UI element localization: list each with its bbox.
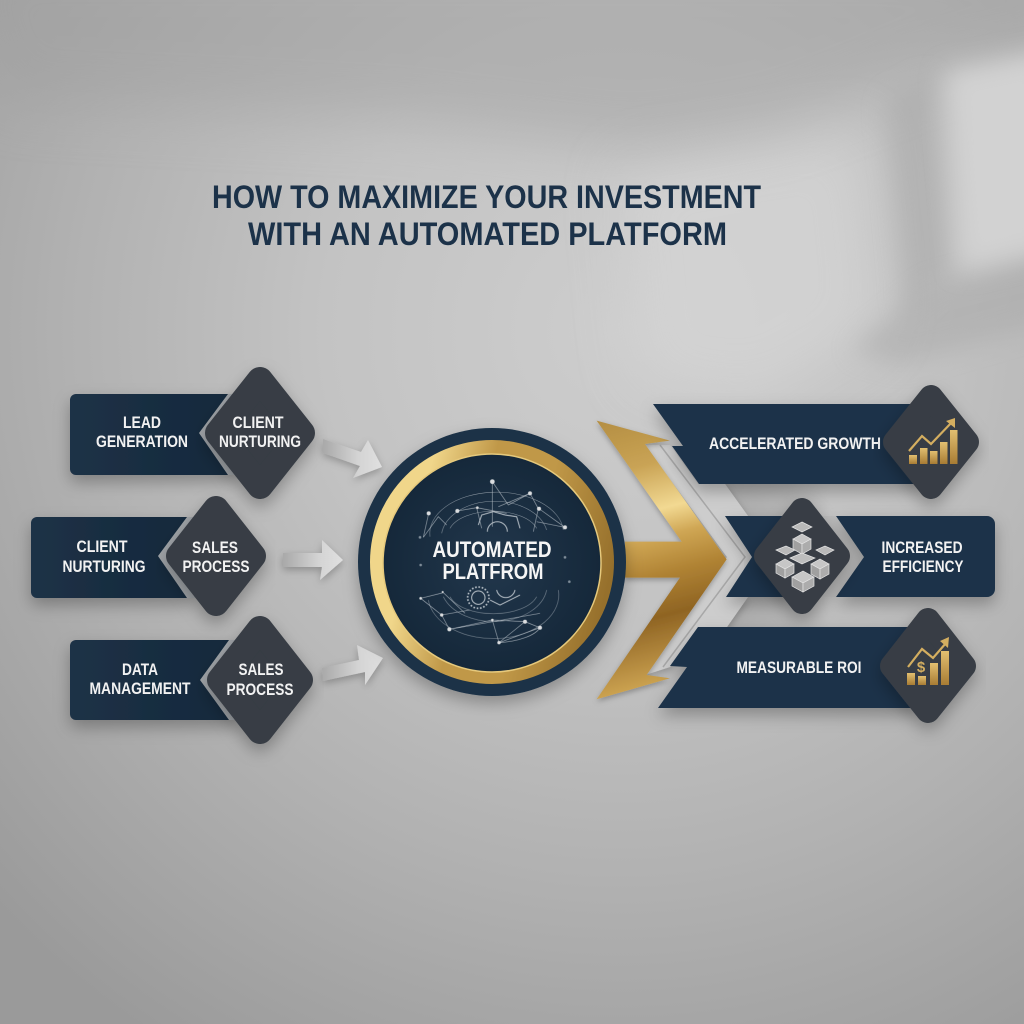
outcome 1: accelerated growth bbox=[653, 397, 967, 487]
label box: client nurturing: CLIENT bbox=[76, 537, 128, 556]
network and gear graphic bbox=[419, 479, 571, 644]
label box: client nurturing bbox=[31, 517, 198, 598]
label box: data management: MANAGEMENT bbox=[90, 679, 191, 698]
banner: INCREASED bbox=[882, 538, 962, 557]
panel: outcomes bbox=[653, 397, 995, 711]
outcome 2: increased efficiency bbox=[725, 510, 995, 602]
icon: dollar growth chart bbox=[892, 620, 964, 711]
central circle: automated platform bbox=[358, 428, 626, 696]
banner bbox=[725, 516, 995, 597]
banner bbox=[658, 627, 915, 708]
diamond: sales process: PROCESS bbox=[182, 557, 250, 576]
icon: growth chart bbox=[895, 397, 967, 487]
platform label: PLATFROM bbox=[442, 559, 544, 584]
diamond: sales process bbox=[179, 509, 253, 603]
outcome 3: measurable roi bbox=[658, 620, 964, 711]
title bbox=[212, 179, 761, 252]
label box: data management bbox=[70, 640, 240, 720]
label box: client nurturing: NURTURING bbox=[62, 557, 146, 576]
icon: dollar growth chart: $ bbox=[917, 659, 926, 676]
diamond: sales process: SALES bbox=[192, 538, 238, 557]
arrow: input 2 to platform bbox=[283, 540, 343, 580]
label box: lead generation: GENERATION bbox=[96, 432, 188, 451]
input row 3 bbox=[70, 629, 300, 731]
title: HOW TO MAXIMIZE YOUR INVESTMENT bbox=[212, 179, 761, 215]
input row 2 bbox=[31, 509, 253, 603]
diamond: client nurturing: NURTURING bbox=[219, 432, 301, 451]
arrow: input 3 to platform bbox=[322, 645, 383, 685]
label box: data management: DATA bbox=[122, 660, 158, 679]
title: WITH AN AUTOMATED PLATFORM bbox=[248, 216, 727, 252]
banner bbox=[653, 404, 920, 484]
platform label: AUTOMATED bbox=[432, 537, 552, 562]
icon: connected cubes bbox=[766, 510, 838, 602]
diamond: sales process bbox=[220, 629, 300, 731]
arrow: input 1 to platform bbox=[323, 439, 382, 478]
diamond: client nurturing bbox=[218, 380, 302, 486]
input row 1 bbox=[70, 380, 302, 486]
gold arrow bbox=[597, 421, 727, 699]
panel: inputs bbox=[31, 380, 302, 731]
label box: lead generation bbox=[70, 394, 240, 475]
banner: EFFICIENCY bbox=[882, 557, 964, 576]
diamond: client nurturing: CLIENT bbox=[232, 413, 284, 432]
platform label bbox=[432, 537, 552, 584]
banner: ACCELERATED GROWTH bbox=[709, 434, 881, 453]
label box: lead generation: LEAD bbox=[123, 413, 161, 432]
diamond: sales process: PROCESS bbox=[226, 680, 294, 699]
banner: MEASURABLE ROI bbox=[736, 658, 862, 677]
diamond: sales process: SALES bbox=[238, 660, 284, 679]
silver chevron behind gold arrow bbox=[645, 445, 830, 675]
